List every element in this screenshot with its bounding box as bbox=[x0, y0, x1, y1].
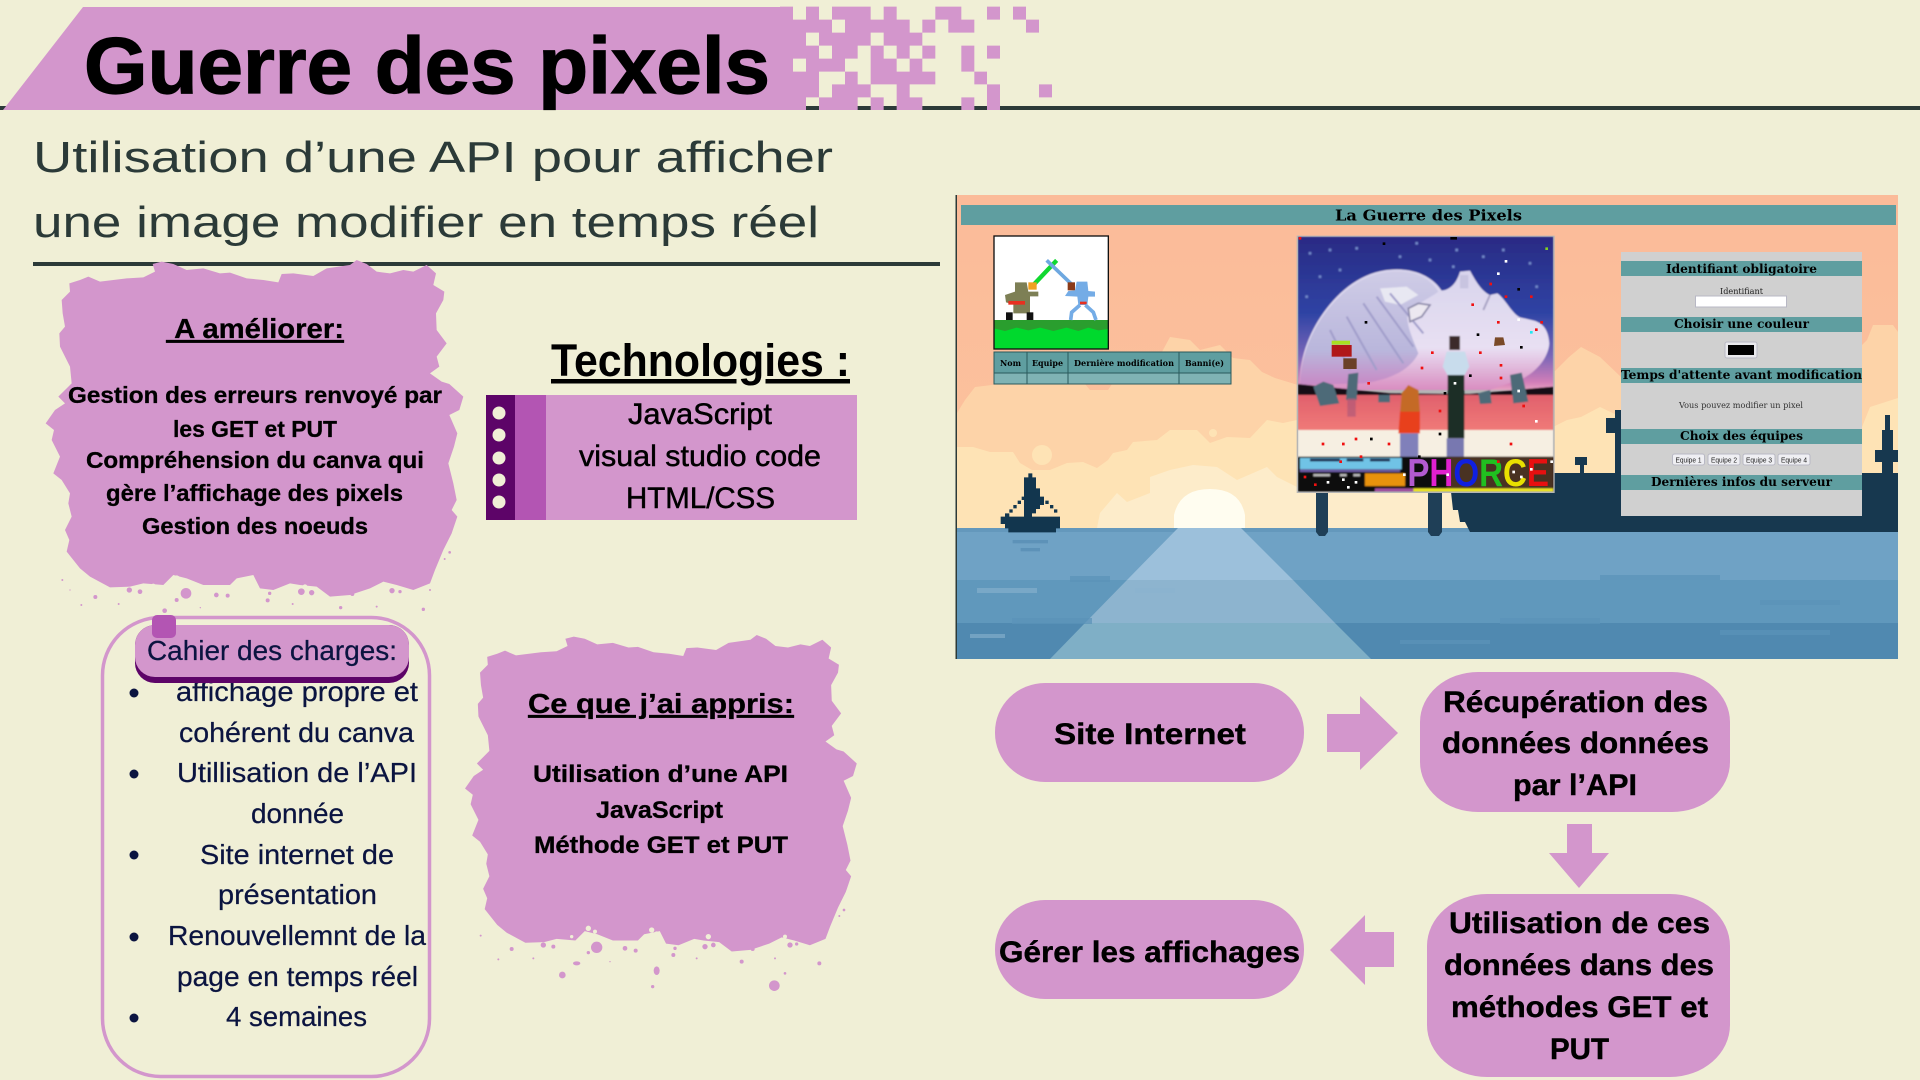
team buttons bbox=[1672, 454, 1810, 465]
clouds bbox=[957, 325, 1898, 528]
identifier field bbox=[1696, 287, 1786, 307]
form headings: Identifiant obligatoire bbox=[1666, 262, 1817, 276]
panel: website screenshot bbox=[956, 195, 1898, 659]
form headings: Temps d'attente avant modification bbox=[1621, 368, 1862, 382]
team buttons: Equipe 1 bbox=[1676, 458, 1702, 464]
flow step: utilisation: méthodes GET et bbox=[1451, 991, 1708, 1024]
flow step: récupération bbox=[1420, 672, 1730, 812]
text: a améliorer: les GET et PUT bbox=[173, 416, 338, 442]
ship mast and tree details bbox=[1575, 410, 1898, 473]
player table: Dernière modification bbox=[1074, 358, 1174, 369]
technologies list: JavaScript bbox=[628, 398, 773, 431]
player table: Nom bbox=[1000, 359, 1021, 369]
player table: Banni(e) bbox=[1185, 358, 1224, 369]
flow step: utilisation bbox=[1427, 894, 1730, 1077]
ground bbox=[1298, 384, 1553, 397]
arrow: right bbox=[1327, 696, 1398, 770]
technologies list: HTML/CSS bbox=[626, 482, 775, 515]
technologies list: visual studio code bbox=[579, 440, 821, 473]
text: a améliorer: gère l’affichage des pixels bbox=[106, 480, 403, 506]
cooldown text: Vous pouvez modifier un pixel bbox=[1678, 401, 1803, 411]
subtitle: une image modifier en temps réel bbox=[33, 198, 819, 247]
flow step: récupération: données données bbox=[1442, 727, 1709, 760]
list text: donnée bbox=[251, 798, 344, 829]
sprites bbox=[1332, 340, 1357, 369]
heading: a améliorer: A améliorer: bbox=[166, 313, 344, 344]
flow step: utilisation: données dans des bbox=[1444, 949, 1714, 982]
text: a améliorer: Gestion des erreurs renvoyé par bbox=[68, 382, 442, 408]
list text: cohérent du canva bbox=[179, 717, 414, 748]
technologies list bbox=[579, 398, 821, 515]
page header bar bbox=[961, 205, 1896, 225]
panel: cahier des charges bbox=[102, 615, 430, 1076]
team buttons: Equipe 4 bbox=[1781, 458, 1807, 464]
flow step: récupération: Récupération des bbox=[1443, 686, 1708, 719]
list text: présentation bbox=[218, 879, 377, 910]
subtitle: Utilisation d’une API pour afficher bbox=[33, 133, 833, 182]
ship silhouette bbox=[1451, 473, 1898, 532]
title banner bbox=[3, 7, 1052, 110]
list text: affichage propre et bbox=[176, 676, 418, 707]
stars bbox=[1307, 243, 1537, 297]
flow step: utilisation: Utilisation de ces bbox=[1449, 907, 1710, 940]
list text bbox=[168, 676, 426, 1032]
badge: cahier des charges bbox=[135, 615, 409, 683]
team buttons: Equipe 3 bbox=[1746, 458, 1772, 464]
panel: ce que j'ai appris bbox=[465, 635, 857, 991]
rocks bbox=[1313, 373, 1528, 406]
fighter left bbox=[1005, 260, 1057, 320]
boy bbox=[1443, 336, 1469, 457]
flow step: gérer les affichages: Gérer les affichages bbox=[999, 936, 1300, 969]
text: a améliorer: Compréhension du canva qui bbox=[86, 447, 424, 473]
list text: Utillisation de l’API bbox=[177, 757, 417, 788]
billboard legs bbox=[1316, 492, 1442, 536]
identifier field: Identifiant bbox=[1720, 287, 1764, 296]
player table: Equipe bbox=[1032, 359, 1064, 369]
title rule bbox=[0, 106, 1920, 110]
bullets bbox=[130, 688, 138, 1022]
heading: ce que j'ai appris: Ce que j’ai appris: bbox=[528, 688, 794, 719]
subtitle bbox=[33, 133, 833, 247]
heading: technologies: Technologies : bbox=[551, 335, 850, 386]
title: Guerre des pixels bbox=[84, 21, 770, 110]
sun bbox=[1174, 489, 1245, 528]
panel: technologies bbox=[486, 395, 857, 520]
form headings: Choix des équipes bbox=[1680, 429, 1803, 443]
text: a améliorer bbox=[68, 382, 442, 539]
team buttons: Equipe 2 bbox=[1711, 458, 1737, 464]
list text: Renouvellemnt de la bbox=[168, 920, 426, 951]
subtitle rule bbox=[33, 262, 940, 266]
text: ce que j'ai appris bbox=[533, 761, 788, 859]
text: ce que j'ai appris: Méthode GET et PUT bbox=[534, 832, 788, 859]
flow step: récupération: par l’API bbox=[1513, 769, 1637, 802]
control form panel bbox=[1621, 252, 1862, 516]
colour picker bbox=[1725, 342, 1757, 358]
form headings: Choisir une couleur bbox=[1674, 317, 1810, 331]
flow step: site internet bbox=[995, 683, 1304, 782]
form headings bbox=[1621, 262, 1862, 489]
flow step: gérer les affichages bbox=[995, 900, 1304, 999]
text: ce que j'ai appris: JavaScript bbox=[596, 797, 723, 824]
list text: page en temps réel bbox=[177, 961, 418, 992]
badge: cahier des charges: Cahier des charges: bbox=[147, 635, 397, 666]
fighter right bbox=[1047, 260, 1096, 320]
player table bbox=[994, 352, 1231, 384]
PHORCE: PHORCE bbox=[1407, 452, 1549, 495]
form headings: Dernières infos du serveur bbox=[1651, 475, 1833, 489]
arrow: down bbox=[1549, 824, 1609, 888]
text: ce que j'ai appris: Utilisation d’une API bbox=[533, 761, 788, 788]
list text: 4 semaines bbox=[226, 1001, 367, 1032]
flow step: utilisation: PUT bbox=[1550, 1033, 1609, 1066]
text: a améliorer: Gestion des noeuds bbox=[142, 513, 368, 539]
small canvas: fighters bbox=[994, 236, 1108, 349]
arrow: left bbox=[1330, 915, 1394, 985]
list text: Site internet de bbox=[200, 839, 394, 870]
flow step: site internet: Site Internet bbox=[1054, 718, 1246, 751]
sea bbox=[957, 528, 1898, 659]
main pixel canvas image bbox=[1297, 236, 1555, 495]
boat bbox=[1001, 473, 1060, 551]
bottom strip bbox=[1298, 457, 1555, 492]
pixel pattern bbox=[780, 7, 1052, 110]
panel: a améliorer bbox=[46, 260, 463, 613]
girl bbox=[1398, 385, 1420, 457]
modified pixels bbox=[1300, 238, 1542, 485]
page header bar: La Guerre des Pixels bbox=[1335, 206, 1522, 224]
